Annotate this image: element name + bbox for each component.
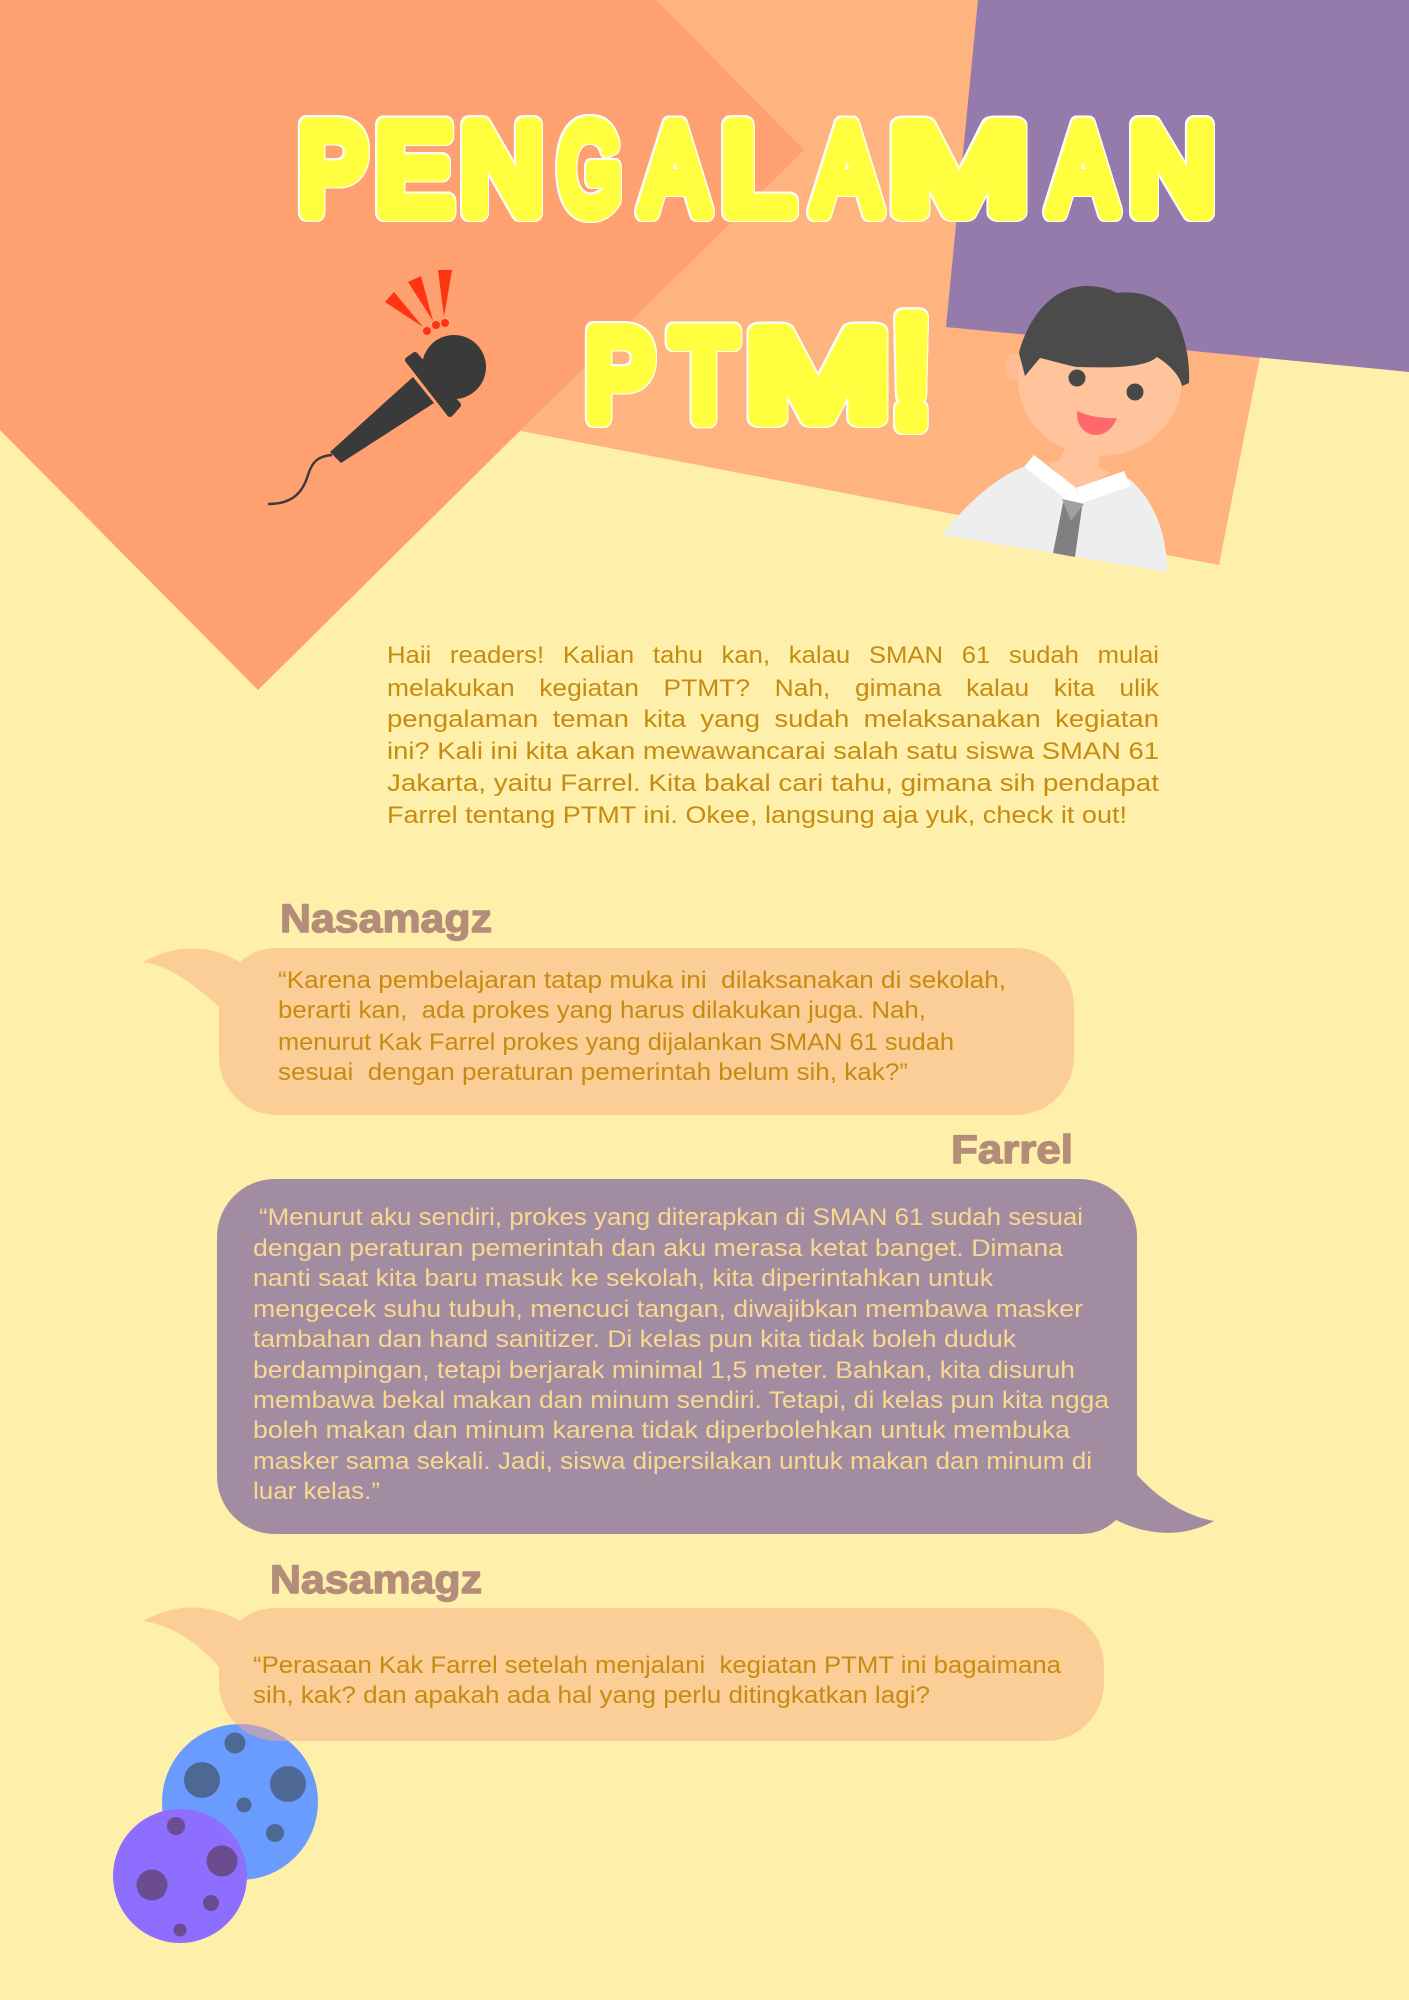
microphone handle [330,377,434,463]
text block: answer: luar kelas.” [253,1478,380,1505]
mouth [1077,411,1117,435]
icon: red exclamation sparks [385,270,452,335]
text block: question two [253,1652,1061,1709]
panel: coral diamond [0,0,804,690]
text block: intro: Jakarta, yaitu Farrel. Kita bakal cari tahu, gimana sih pendapat [387,770,1159,797]
text block: answer: masker sama sekali. Jadi, siswa dipersilakan untuk makan dan minum di [253,1448,1092,1475]
text block: answer: membawa bekal makan dan minum sendiri. Tetapi, di kelas pun kita ngga [253,1387,1110,1414]
panel: question bubble two [143,1608,1104,1741]
title line one: N [1130,101,1215,239]
text block: answer: “Menurut aku sendiri, prokes yang diterapkan di SMAN 61 sudah sesuai [259,1204,1083,1231]
text block: answer: mengecek suhu tubuh, mencuci tangan, diwajibkan membawa masker [253,1296,1083,1323]
text block: answer: nanti saat kita baru masuk ke sekolah, kita diperintahkan untuk [253,1265,994,1292]
text block: question one [278,967,1006,1086]
hair [1019,286,1189,386]
icon: purple planet [113,1809,247,1943]
ear [1005,353,1023,381]
neck [1047,445,1110,492]
panel: purple rotated rectangle [946,0,1409,372]
panel: answer bubble [217,1179,1214,1534]
tie [1053,503,1082,557]
text block: intro: melakukan kegiatan PTMT? Nah, gimana kalau kita ulik [387,675,1160,702]
text block: question two: “Perasaan Kak Farrel setelah menjalani kegiatan PTMT ini bagaimana [253,1652,1061,1679]
text block: question one: “Karena pembelajaran tatap muka ini dilaksanakan di sekolah, [278,967,1006,994]
microphone cable [268,455,332,504]
title line one: N [461,101,543,239]
text block: answer: berdampingan, tetapi berjarak minimal 1,5 meter. Bahkan, kita disuruh [253,1357,1075,1384]
microphone ring [408,355,458,414]
text block: intro [387,642,1160,829]
title line one: M [890,101,1028,239]
text block: question one: sesuai dengan peraturan pemerintah belum sih, kak?” [278,1059,908,1086]
text block: question two: sih, kak? dan apakah ada hal yang perlu ditingkatkan lagi? [253,1682,930,1709]
text block: answer: dengan peraturan pemerintah dan aku merasa ketat banget. Dimana [253,1235,1064,1262]
text block: answer: tambahan dan hand sanitizer. Di kelas pun kita tidak boleh duduk [253,1326,1017,1353]
icon: boy character [942,286,1189,572]
text block: answer: boleh makan dan minum karena tidak diperbolehkan untuk membuka [253,1417,1071,1444]
icon: blue planet [162,1724,318,1880]
shirt [942,467,1167,572]
title line two: P [586,307,654,445]
title line one: A [815,101,879,239]
icon: microphone [268,335,486,504]
face [1018,304,1182,456]
collar [1024,455,1082,503]
title line one: A [643,101,707,239]
text block: intro: Farrel tentang PTMT ini. Okee, langsung aja yuk, check it out! [387,802,1127,829]
title line one: L [722,101,793,239]
heading: Nasamagz second: Nasamagz [270,1558,482,1602]
panel: question bubble one [143,948,1074,1115]
text block: question one: menurut Kak Farrel prokes yang dijalankan SMAN 61 sudah [278,1029,954,1056]
text block: intro: Haii readers! Kalian tahu kan, kalau SMAN 61 sudah mulai [387,642,1159,669]
title line one: G [559,101,621,239]
title line two: ! [890,285,933,458]
text block: intro: pengalaman teman kita yang sudah melaksanakan kegiatan [387,706,1159,733]
eyes [1068,370,1086,386]
title line one: P [299,101,367,239]
title line two: T [672,307,736,445]
heading: Farrel: Farrel [951,1128,1073,1172]
title line one: E [376,101,452,239]
title line one: A [1051,101,1115,239]
heading: Nasamagz first: Nasamagz [280,897,492,941]
text block: answer [253,1204,1110,1505]
text block: intro: ini? Kali ini kita akan mewawancarai salah satu siswa SMAN 61 [387,738,1159,765]
title line two: M [747,307,889,445]
text block: question one: berarti kan, ada prokes yang harus dilakukan juga. Nah, [278,997,926,1024]
microphone head [422,335,486,399]
panel: orange rotated rectangle [500,0,1330,565]
title [299,101,1215,458]
